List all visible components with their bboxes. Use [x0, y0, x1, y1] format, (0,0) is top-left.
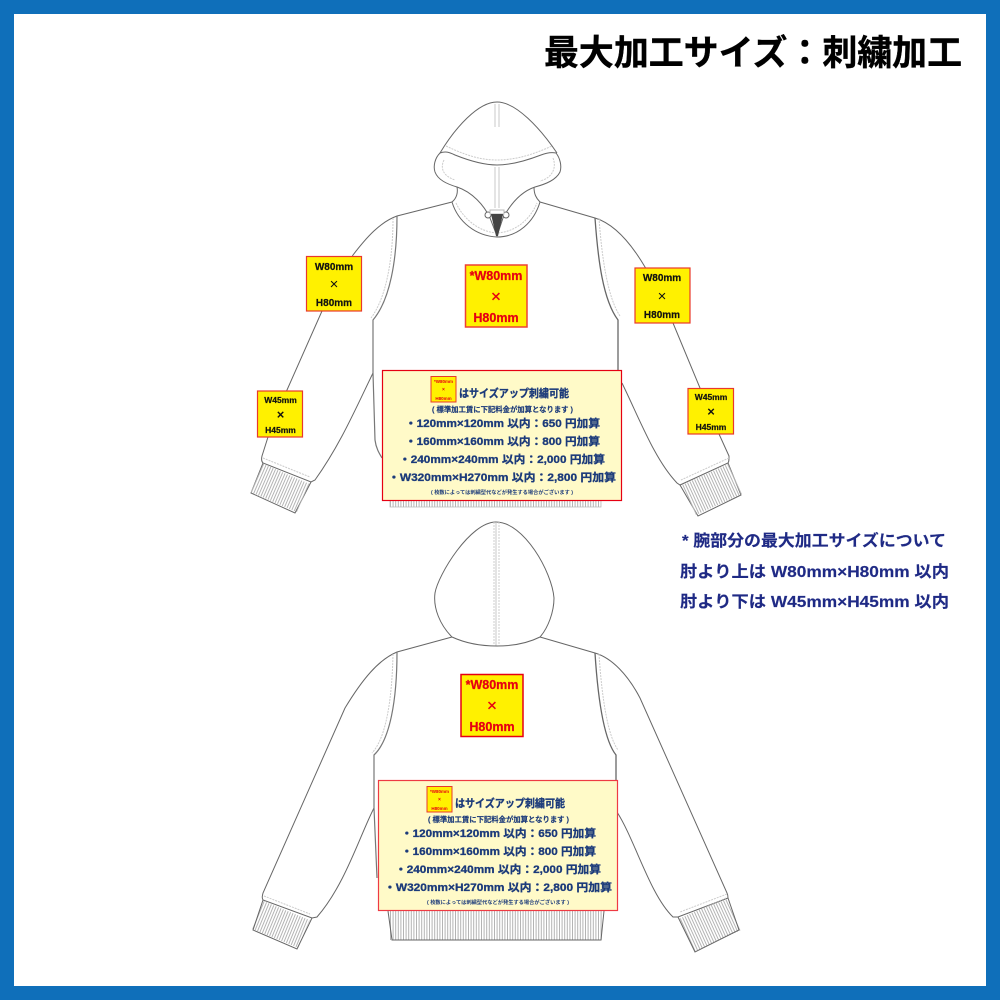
size box: right upper sleeve: H80mm — [644, 310, 680, 321]
back hoodie illustration — [253, 522, 739, 952]
sleeve size note: 肘より上は W80mm×H80mm 以内 — [680, 563, 949, 581]
panel: back size-up pricing: ・160mm×160mm 以内：800 円加算 — [401, 844, 596, 858]
size box: right lower sleeve — [688, 388, 734, 434]
size box: front chest: *W80mm — [470, 269, 522, 283]
size box: back: H80mm — [469, 720, 515, 734]
panel: front size-up pricing: ・160mm×160mm 以内：800 円加算 — [405, 434, 600, 448]
size box: left lower sleeve: × — [277, 407, 285, 422]
size box: back: *W80mm — [466, 678, 518, 692]
panel: back size-up pricing: ・240mm×240mm 以内：2,000 円加算 — [395, 862, 601, 876]
front hoodie illustration — [251, 102, 741, 516]
size box: right upper sleeve: × — [658, 288, 666, 305]
panel: front size-up pricing: ・240mm×240mm 以内：2,000 円加算 — [399, 452, 605, 466]
mini size box: *W80mm — [430, 789, 449, 794]
hood back — [435, 522, 554, 637]
panel footnote: ( 枚数によっては刺繍型代などが発生する場合がございます ) — [431, 489, 573, 496]
mini size box: H80mm — [435, 396, 452, 401]
size box: right lower sleeve: H45mm — [696, 422, 727, 432]
drawstring eyelets — [485, 212, 491, 218]
panel: back size-up pricing — [378, 780, 618, 910]
shoulders and sleeves — [262, 637, 452, 918]
panel footnote: ( 枚数によっては刺繍型代などが発生する場合がございます ) — [427, 899, 569, 906]
mini size box: *W80mm — [434, 379, 453, 384]
size box: right lower sleeve: W45mm — [695, 392, 728, 402]
shoulders and sleeves — [262, 202, 452, 482]
cuffs — [258, 915, 304, 934]
mini size box — [431, 376, 456, 402]
panel: front size-up pricing: ・W320mm×H270mm 以内：2,800 円加算 — [388, 470, 616, 484]
price rows: ・120mm×120mm 以内：650 円加算 — [405, 416, 600, 430]
mini size box: H80mm — [431, 806, 448, 811]
size box: right lower sleeve: × — [707, 404, 715, 419]
size box: left lower sleeve: H45mm — [265, 425, 296, 435]
armholes and body — [374, 652, 397, 878]
panel subheading: ( 標準加工賃に下記料金が加算となります ) — [428, 814, 569, 824]
collar seam — [452, 637, 540, 646]
price rows: ・120mm×120mm 以内：650 円加算 — [401, 826, 596, 840]
size box: left lower sleeve — [258, 391, 302, 437]
panel: front size-up pricing — [382, 370, 622, 500]
size box: left upper sleeve: × — [330, 276, 338, 293]
size box: right upper sleeve: W80mm — [643, 273, 681, 284]
armholes and body — [373, 216, 397, 458]
mini size box — [427, 786, 452, 812]
size box: left upper sleeve: W80mm — [315, 262, 353, 273]
size box: front chest: H80mm — [473, 311, 519, 325]
size box: back — [461, 674, 523, 736]
panel heading: はサイズアップ刺繍可能 — [455, 796, 565, 810]
hood — [440, 102, 557, 153]
neck and collar — [452, 187, 540, 237]
size box: left lower sleeve: W45mm — [264, 395, 297, 405]
cuffs — [251, 463, 741, 516]
sleeve size note: * 腕部分の最大加工サイズについて — [682, 531, 946, 550]
size box: right upper sleeve — [635, 268, 690, 323]
panel: back size-up pricing: ・W320mm×H270mm 以内：2,800 円加算 — [384, 880, 612, 894]
panel subheading: ( 標準加工賃に下記料金が加算となります ) — [432, 404, 573, 414]
panel heading: はサイズアップ刺繍可能 — [459, 386, 569, 400]
hem ribbing — [390, 501, 601, 507]
size box: left upper sleeve: H80mm — [316, 298, 352, 309]
size box: front chest — [466, 265, 527, 327]
size box: front chest: × — [491, 287, 501, 306]
size box: back: × — [487, 696, 497, 715]
mini size box: × — [438, 797, 441, 803]
mini size box: × — [442, 387, 445, 393]
sleeve size note — [680, 531, 949, 611]
size box: left upper sleeve — [306, 256, 362, 311]
sleeve size note: 肘より下は W45mm×H45mm 以内 — [680, 593, 949, 611]
title: 最大加工サイズ：刺繍加工 — [544, 33, 962, 73]
hem ribbing — [390, 911, 603, 940]
